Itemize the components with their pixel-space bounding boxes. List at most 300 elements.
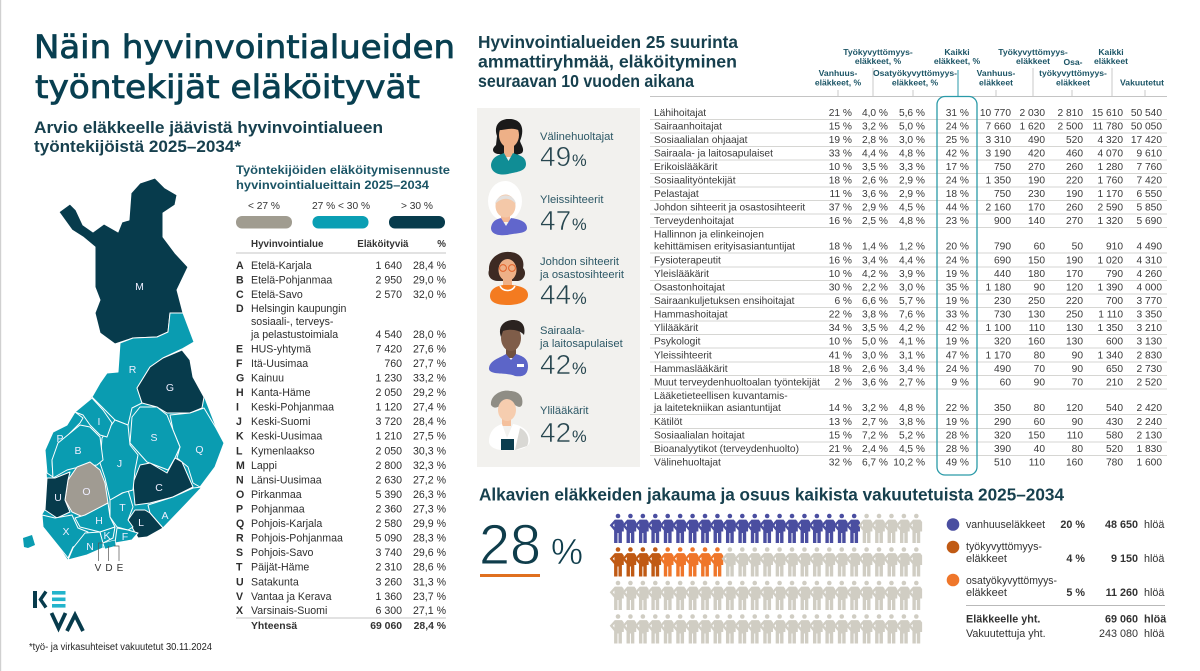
occupation table: 60 xyxy=(1000,378,1011,388)
occupation table: 10,2 % xyxy=(893,458,925,468)
occupation table: 23 % xyxy=(946,216,969,227)
map letters: B xyxy=(74,445,82,457)
table rows: 1 360 xyxy=(375,591,402,603)
table rows: E xyxy=(236,344,243,356)
occupation table header: Vakuutetut xyxy=(1120,78,1164,88)
big percentage: 28 xyxy=(479,513,541,577)
partial disability row: eläkkeet xyxy=(966,587,1007,599)
occupation table: 1,2 % xyxy=(899,242,925,252)
person: Ylilääkärit: 42 xyxy=(540,417,571,448)
occupation table: 6,7 % xyxy=(862,458,888,468)
table rows: Helsingin kaupungin xyxy=(251,303,347,315)
table rows: 29,0 % xyxy=(413,274,447,286)
table rows: 27,3 % xyxy=(413,504,447,516)
occupation table header: eläkkeet xyxy=(1056,78,1090,88)
region R Pohjois-Pohjanmaa xyxy=(92,313,194,425)
table rows: 760 xyxy=(384,358,402,370)
occupation table: 50 050 xyxy=(1131,122,1162,132)
occupation table: Sosiaalityöntekijät xyxy=(654,176,736,186)
occupation table header: Työkyvyttömyys- xyxy=(843,47,913,57)
occupation table: 40 xyxy=(1034,444,1045,455)
occupation table: 42 % xyxy=(946,323,969,334)
occupation table: Sairaankuljetuksen ensihoitajat xyxy=(654,296,795,307)
occupation table: 18 % xyxy=(829,242,852,252)
occupation table: 160 xyxy=(1066,458,1083,468)
occupation table header: eläkkeet, % xyxy=(815,78,862,88)
table rows: 28,3 % xyxy=(413,532,447,544)
partial disability row: 5 % xyxy=(1066,587,1085,599)
occupation table header: työkyvyttömyys- xyxy=(1039,68,1107,78)
person: Yleissihteerit: % xyxy=(572,216,587,234)
occupation table: 20 % xyxy=(946,242,969,252)
occupation table: 580 xyxy=(1106,430,1123,442)
occupation table: 490 xyxy=(1028,135,1045,146)
occupation table: 9 610 xyxy=(1136,148,1162,160)
regional table xyxy=(236,239,447,632)
person: Johdon sihteerit: % xyxy=(572,290,587,308)
person: Sairaala- ja laitosapulaiset: ja laitosapulaiset xyxy=(539,338,624,350)
icon: avatar xyxy=(488,252,528,305)
occupation table: 170 xyxy=(1066,269,1083,280)
table rows: Q xyxy=(236,518,244,530)
occupation table: 180 xyxy=(1028,269,1045,280)
occupation table: 2 420 xyxy=(1136,403,1162,414)
occupation table: 350 xyxy=(994,403,1011,414)
occupation table: 3,6 % xyxy=(862,189,888,200)
occupation table: 3,0 % xyxy=(899,135,925,146)
occupation table: 31 % xyxy=(946,108,969,119)
map letters: P xyxy=(56,433,64,445)
occupation table: 4 320 xyxy=(1098,135,1123,146)
title: työntekijät eläköityvät xyxy=(35,68,420,106)
map letters: S xyxy=(150,432,158,444)
occupation table: 790 xyxy=(1106,269,1123,280)
occupation table: 110 xyxy=(1067,430,1083,442)
occupation table: 110 xyxy=(1029,458,1045,468)
occupation table: 19 % xyxy=(946,296,969,307)
table rows: 27,7 % xyxy=(413,358,447,370)
occupation table: 150 xyxy=(1028,256,1045,266)
table rows: 2 050 xyxy=(375,446,402,458)
occupation table: 28 % xyxy=(946,430,969,442)
region Uusimaa south xyxy=(103,540,116,549)
occupation table: 3,3 % xyxy=(899,162,925,173)
table rows: ja pelastustoimiala xyxy=(250,329,338,341)
occupation heading: ammattiryhmää, eläköityminen xyxy=(478,52,737,72)
table rows: 28,0 % xyxy=(413,329,447,341)
icon: avatar xyxy=(488,181,527,235)
region P Pohjanmaa xyxy=(45,412,83,477)
icon: avatar xyxy=(489,391,530,450)
occupation table: 2 240 xyxy=(1136,417,1162,428)
occupation table: 5,0 % xyxy=(862,336,888,348)
occupation table: 1 620 xyxy=(1020,122,1045,132)
occupation table: Välinehuoltajat xyxy=(654,458,721,468)
person: Johdon sihteerit: 44 xyxy=(540,279,571,310)
region S Pohjois-Savo xyxy=(130,407,180,470)
occupation table: 2,9 % xyxy=(862,202,888,214)
map letters: K xyxy=(103,530,111,542)
occupation table: 130 xyxy=(1066,323,1083,334)
old-age row: hlöä xyxy=(1144,519,1164,531)
occupation table: 2,8 % xyxy=(862,135,888,146)
table rows: 2 580 xyxy=(375,518,402,530)
occupation table: 2,9 % xyxy=(899,176,925,186)
map letters: A xyxy=(161,510,169,522)
map letters: G xyxy=(166,382,174,394)
occupation table: 4,4 % xyxy=(899,256,925,266)
person: Sairaala- ja laitosapulaiset: 42 xyxy=(540,349,571,380)
subtitle: työntekijöistä 2025–2034* xyxy=(34,137,242,156)
table rows: Kainuu xyxy=(251,372,284,384)
occupation table: 230 xyxy=(1028,189,1045,200)
occupation table: 21 % xyxy=(829,108,852,119)
occupation table: 1 110 xyxy=(1098,310,1123,320)
occupation table: Erikoislääkärit xyxy=(654,162,718,173)
region U Satakunta xyxy=(45,472,70,518)
old-age row: 48 650 xyxy=(1105,519,1138,531)
occupation table: 1 320 xyxy=(1098,216,1123,227)
title xyxy=(34,28,455,106)
occupation table: 6 % xyxy=(834,296,852,307)
occupation table: 3 310 xyxy=(986,135,1011,146)
occupation table: 130 xyxy=(1066,336,1083,348)
occupation table: 49 % xyxy=(946,458,969,468)
old-age row: vanhuuseläkkeet xyxy=(966,519,1045,531)
occupation table: 1 830 xyxy=(1136,444,1162,455)
region O Pirkanmaa xyxy=(65,462,108,517)
occupation table: 11 % xyxy=(830,189,852,200)
occupation table: 320 xyxy=(994,336,1011,348)
old-age row: 20 % xyxy=(1060,519,1085,531)
map callout letters V D E: E xyxy=(117,563,124,574)
occupation table: 160 xyxy=(1028,336,1045,348)
occupation table: 4,4 % xyxy=(862,148,888,160)
table rows: 26,3 % xyxy=(413,489,447,501)
table total row: Yhteensä xyxy=(251,621,297,632)
occupation table: 3,4 % xyxy=(899,364,925,375)
occupation table: 1 100 xyxy=(986,323,1011,334)
occupation table: 28 % xyxy=(946,444,969,455)
totals xyxy=(966,614,1167,640)
occupation table: 15 610 xyxy=(1092,108,1123,119)
occupation table: 320 xyxy=(994,430,1011,442)
table rows: G xyxy=(236,372,244,384)
occupation table: 4,0 % xyxy=(862,108,888,119)
occupation table: 250 xyxy=(1066,310,1083,320)
table rows: Kymenlaakso xyxy=(251,446,315,458)
occupation table header: eläkkeet, % xyxy=(892,78,939,88)
region A Etelä-Karjala xyxy=(148,487,202,528)
table rows: 2 050 xyxy=(375,387,402,399)
panel: top five occupations xyxy=(477,108,640,467)
colour legend xyxy=(236,201,445,228)
map letters: O xyxy=(82,486,91,498)
occupation table: 5,7 % xyxy=(899,296,925,307)
occupation table: 520 xyxy=(1106,444,1123,455)
occupation heading: seuraavan 10 vuoden aikana xyxy=(478,71,694,91)
occupation table: 6,6 % xyxy=(862,296,888,307)
occupation table: 9 % xyxy=(951,378,969,388)
occupation table: 11 780 xyxy=(1093,122,1123,132)
occupation table: 4 260 xyxy=(1136,269,1162,280)
map letters: N xyxy=(86,541,94,553)
person: Välinehuoltajat: Välinehuoltajat xyxy=(540,131,614,143)
table rows: Pohjois-Pohjanmaa xyxy=(251,532,343,544)
occupation table: 3,0 % xyxy=(862,350,888,362)
occupation table: 7 760 xyxy=(1136,162,1162,173)
occupation table: 3,9 % xyxy=(899,269,925,280)
table rows: Keski-Uusimaa xyxy=(251,430,322,442)
occupation table: 42 % xyxy=(946,148,969,160)
region G Kainuu xyxy=(137,350,204,413)
region Q Pohjois-Karjala xyxy=(170,408,224,487)
occupation table: Sosiaalialan ohjaajat xyxy=(654,135,748,146)
occupation table: 270 xyxy=(1066,216,1083,227)
occupation table header: Osa- xyxy=(1063,57,1083,67)
occupation table: 5,0 % xyxy=(899,122,925,132)
occupation table: 60 xyxy=(1034,417,1045,428)
occupation table: 190 xyxy=(1066,189,1083,200)
occupation table: 780 xyxy=(1106,458,1123,468)
occupation table: 220 xyxy=(1066,296,1083,307)
old-age row xyxy=(947,518,1164,531)
occupation table header: Kaikki xyxy=(1098,47,1124,57)
occupation table: 6 550 xyxy=(1136,189,1162,200)
occupation table: 1,4 % xyxy=(862,242,888,252)
occupation table: 2 830 xyxy=(1136,350,1162,362)
totals: hlöä xyxy=(1144,628,1164,640)
occupation table: 110 xyxy=(1029,323,1045,334)
table rows: 28,6 % xyxy=(413,562,447,574)
occupation table: 3,8 % xyxy=(862,310,888,320)
occupation table: 33 % xyxy=(946,310,969,320)
occupation table: kehittämisen erityisasiantuntijat xyxy=(654,242,795,252)
occupation table: 3,6 % xyxy=(862,378,888,388)
table rows: Pohjanmaa xyxy=(251,504,305,516)
occupation table: 2,7 % xyxy=(899,378,925,388)
map of Finland xyxy=(23,178,224,560)
table rows: Satakunta xyxy=(251,576,299,588)
disability row: eläkkeet xyxy=(966,553,1007,565)
occupation table: 3,1 % xyxy=(899,350,925,362)
row 1: old-age pension 20, rest grey xyxy=(610,514,922,543)
occupation table: 2 810 xyxy=(1058,108,1083,119)
occupation table header xyxy=(650,47,1167,96)
occupation table: 390 xyxy=(994,444,1011,455)
occupation table: 120 xyxy=(1066,282,1083,294)
occupation table: 910 xyxy=(1106,242,1123,252)
totals: hlöä xyxy=(1144,614,1167,626)
title: Näin hyvinvointialueiden xyxy=(34,28,455,66)
occupation table: 1 170 xyxy=(1098,189,1123,200)
occupation table: 3,0 % xyxy=(899,282,925,294)
occupation table: 490 xyxy=(994,364,1011,375)
table rows: 27,6 % xyxy=(413,344,447,356)
disability row: hlöä xyxy=(1144,553,1164,565)
table rows: X xyxy=(236,605,243,617)
occupation table: 4,2 % xyxy=(899,323,925,334)
occupation table: 4,8 % xyxy=(899,148,925,160)
table rows: M xyxy=(236,460,245,472)
table rows: V xyxy=(236,591,243,603)
totals: 243 080 xyxy=(1099,628,1138,640)
table rows: 29,6 % xyxy=(413,547,447,559)
occupation table: 1 350 xyxy=(1098,323,1123,334)
occupation table: 520 xyxy=(1066,135,1083,146)
table rows: Pohjois-Karjala xyxy=(251,518,322,530)
occupation table: 3,5 % xyxy=(862,323,888,334)
person: Johdon sihteerit xyxy=(488,252,625,310)
table rows: B xyxy=(236,274,244,286)
occupation table: 90 xyxy=(1072,350,1083,362)
subtitle xyxy=(34,118,383,156)
occupation table: 260 xyxy=(1066,162,1083,173)
occupation table: 2,9 % xyxy=(899,189,925,200)
table rows: Itä-Uusimaa xyxy=(251,358,308,370)
occupation table: 690 xyxy=(994,256,1011,266)
table rows: 3 740 xyxy=(375,547,402,559)
table rows: 5 090 xyxy=(375,532,402,544)
occupation table: 3,8 % xyxy=(899,417,925,428)
occupation table: 2 520 xyxy=(1136,378,1162,388)
table rows xyxy=(236,260,447,617)
occupation table: 90 xyxy=(1034,282,1045,294)
row 4: grey xyxy=(610,614,922,644)
occupation table: 650 xyxy=(1106,364,1123,375)
occupation table: 7 420 xyxy=(1136,176,1162,186)
occupation table: Lähihoitajat xyxy=(654,108,706,119)
partial disability row xyxy=(947,574,1164,599)
table rows: 6 300 xyxy=(375,605,402,617)
table total row xyxy=(251,621,446,632)
region I Keski-Pohjanmaa xyxy=(75,398,112,437)
Keva logo xyxy=(33,591,83,631)
occupation table: 150 xyxy=(1028,430,1045,442)
occupation table: 19 % xyxy=(946,336,969,348)
map table heading: Työntekijöiden eläköitymisennuste xyxy=(236,163,450,177)
occupation table: Hallinnon ja elinkeinojen xyxy=(654,230,764,240)
occupation table: 70 xyxy=(1072,378,1083,388)
person: Sairaala- ja laitosapulaiset xyxy=(489,320,624,380)
occupation table: Pelastajat xyxy=(654,189,699,200)
occupation table: 4 490 xyxy=(1136,242,1162,252)
occupation table: 15 % xyxy=(829,122,852,132)
table rows: O xyxy=(236,489,244,501)
occupation table: 4 000 xyxy=(1136,282,1162,294)
occupation table: 2 % xyxy=(834,378,852,388)
occupation table: Lääketieteellisen kuvantamis- xyxy=(654,391,788,402)
occupation table: Johdon sihteerit ja osastosihteerit xyxy=(654,202,805,214)
map letters: F xyxy=(122,531,128,543)
table rows: 5 390 xyxy=(375,489,402,501)
occupation table: 190 xyxy=(1066,256,1083,266)
table rows: C xyxy=(236,289,244,301)
totals: 69 060 xyxy=(1105,614,1138,626)
partial disability row: 11 260 xyxy=(1106,587,1138,599)
occupation table: 1 340 xyxy=(1098,350,1123,362)
pictogram: 100 figures xyxy=(610,514,922,644)
table rows: 4 540 xyxy=(375,329,402,341)
table rows: P xyxy=(236,504,243,516)
occupation heading: Hyvinvointialueiden 25 suurinta xyxy=(478,32,738,52)
occupation table: 25 % xyxy=(946,135,969,146)
occupation table header: Vanhuus- xyxy=(819,68,857,78)
occupation table: Sairaanhoitajat xyxy=(654,122,722,132)
person: Johdon sihteerit: ja osastosihteerit xyxy=(539,269,625,281)
occupation table: 700 xyxy=(1106,296,1123,307)
table rows: 2 950 xyxy=(375,274,402,286)
occupation table: 2 030 xyxy=(1020,108,1045,119)
occupation table: 30 % xyxy=(829,282,852,294)
map letters: C xyxy=(155,482,163,494)
occupation table: 4,8 % xyxy=(899,403,925,414)
map letters xyxy=(54,281,204,553)
table rows: 1 640 xyxy=(375,260,402,272)
occupation table: 90 xyxy=(1072,364,1083,375)
occupation table: 750 xyxy=(994,189,1011,200)
occupation table: Fysioterapeutit xyxy=(654,256,721,266)
table rows: 1 210 xyxy=(375,430,402,442)
table rows: Lappi xyxy=(251,460,277,472)
table rows: 2 360 xyxy=(375,504,402,516)
table rows: Etelä-Pohjanmaa xyxy=(251,274,332,286)
occupation table: Yleislääkärit xyxy=(654,269,709,280)
map letters: T xyxy=(119,502,126,514)
colour legend: < 27 % xyxy=(248,201,280,212)
occupation table: Sairaala- ja laitosapulaiset xyxy=(654,148,773,160)
occupation table: 70 xyxy=(1034,364,1045,375)
occupation table: 1 390 xyxy=(1098,282,1123,294)
occupation table header: Osatyökyvyttömyys- xyxy=(873,68,957,78)
occupation table: 5,6 % xyxy=(899,108,925,119)
person: Yleissihteerit xyxy=(488,181,604,236)
table total row: 69 060 xyxy=(370,621,402,632)
map letters: X xyxy=(62,526,70,538)
occupation table: 10 % xyxy=(829,162,852,173)
table header xyxy=(236,239,446,253)
occupation table: 510 xyxy=(994,458,1011,468)
table rows: 27,4 % xyxy=(413,402,447,414)
table rows: 27,2 % xyxy=(413,474,447,486)
occupation table header: eläkkeet, % xyxy=(934,56,981,66)
occupation table: 19 % xyxy=(946,417,969,428)
person: Yleissihteerit: 47 xyxy=(540,205,571,236)
occupation table: 1 280 xyxy=(1098,162,1123,173)
occupation table header: Työkyvyttömyys- xyxy=(998,47,1068,57)
occupation table: 190 xyxy=(1028,176,1045,186)
occupation table: 7,2 % xyxy=(862,430,888,442)
map letters: U xyxy=(54,492,62,504)
map letters: L xyxy=(138,517,144,529)
region B Etelä-Pohjanmaa xyxy=(52,425,103,478)
big percentage xyxy=(479,513,583,577)
occupation table: 16 % xyxy=(829,216,852,227)
occupation table: 90 xyxy=(1034,378,1045,388)
occupation table: 2 130 xyxy=(1136,430,1162,442)
table rows: A xyxy=(236,260,244,272)
map callout letters V D E xyxy=(95,543,124,574)
occupation table: 47 % xyxy=(946,350,969,362)
occupation table: 22 % xyxy=(829,310,852,320)
occupation table: 220 xyxy=(1066,176,1083,186)
occupation table: 750 xyxy=(994,162,1011,173)
occupation table: 17 % xyxy=(946,162,969,173)
occupation table: 230 xyxy=(994,296,1011,307)
occupation table: 19 % xyxy=(946,269,969,280)
occupation table: 3,4 % xyxy=(862,256,888,266)
region H Kanta-Häme xyxy=(75,503,115,532)
